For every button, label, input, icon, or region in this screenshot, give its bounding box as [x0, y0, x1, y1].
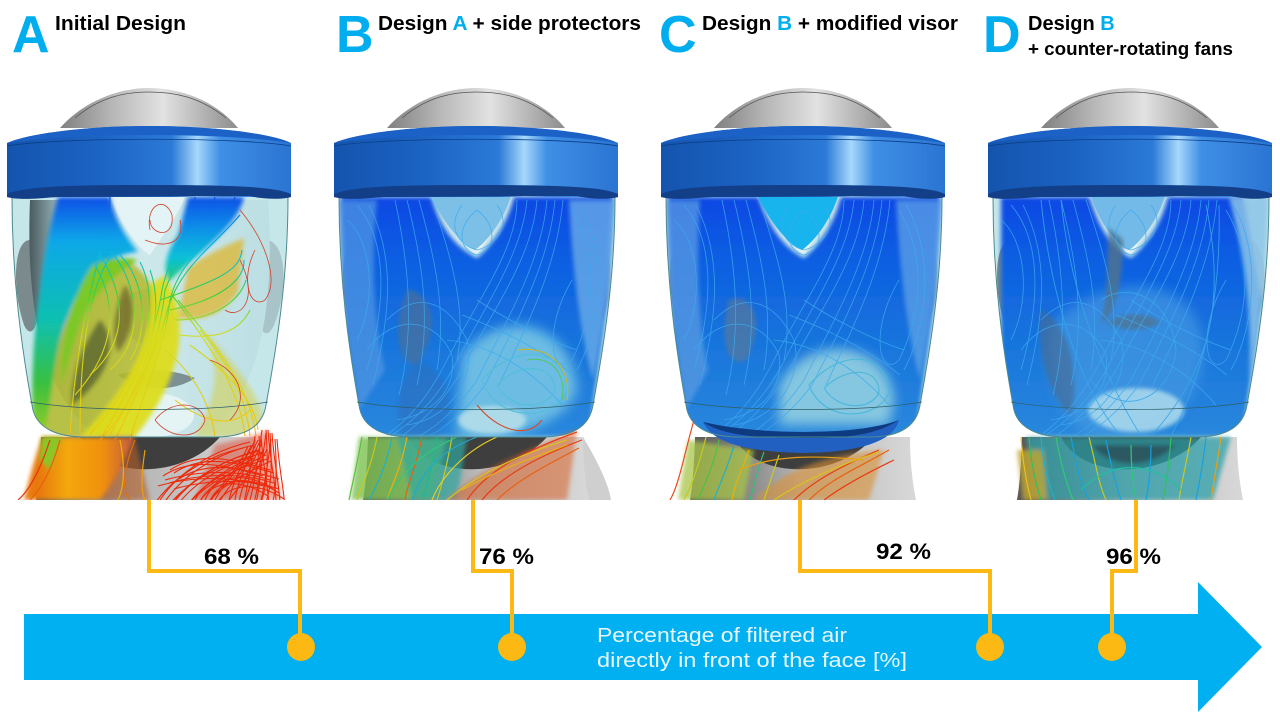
scale caption: Percentage of filtered air [597, 624, 847, 647]
connector A 68 %: 68 % [204, 544, 259, 569]
neck flow B [351, 430, 577, 500]
heading C: C [659, 6, 697, 64]
streamlines C: blue airflow [666, 197, 942, 500]
heading A: Initial Design [55, 13, 186, 35]
heading C [659, 6, 958, 64]
connector B 76 % [473, 500, 534, 661]
neck flow C [678, 440, 884, 500]
neck flow A [24, 430, 282, 500]
streamlines D: blue airflow across the whole face [1001, 197, 1269, 500]
panel: design C modified visor [661, 88, 945, 500]
white cover below images [0, 500, 1280, 530]
heading B: Design A + side protectors [378, 13, 641, 35]
heading B [336, 6, 641, 64]
streamlines A: coloured airflow [18, 197, 285, 509]
heading D [983, 6, 1233, 64]
connector C 92 % [800, 500, 1004, 661]
heading A: A [12, 6, 50, 64]
connector D 96 % [1098, 500, 1161, 661]
panel: design A initial design [7, 88, 291, 509]
modified visor lower lip [703, 420, 899, 453]
scale caption [597, 624, 907, 672]
panel: design D counter-rotating fans [988, 88, 1272, 500]
heading D: Design B [1028, 13, 1115, 35]
heading B: B [336, 6, 374, 64]
heading C: Design B + modified visor [702, 13, 958, 35]
streamlines B: blue airflow with lower-face recirculation [339, 197, 615, 500]
heading D: D [983, 6, 1021, 64]
heading D: + counter-rotating fans [1028, 39, 1233, 59]
neck flow D [1017, 437, 1231, 500]
connector C 92 %: 92 % [876, 539, 931, 564]
heading A [12, 6, 186, 64]
arrow: percentage scale [24, 582, 1262, 712]
connector B 76 %: 76 % [479, 544, 534, 569]
connector D 96 %: 96 % [1106, 544, 1161, 569]
scale caption: directly in front of the face [%] [597, 649, 907, 672]
panel: design B side protectors [334, 88, 618, 500]
connector A 68 % [149, 500, 315, 661]
